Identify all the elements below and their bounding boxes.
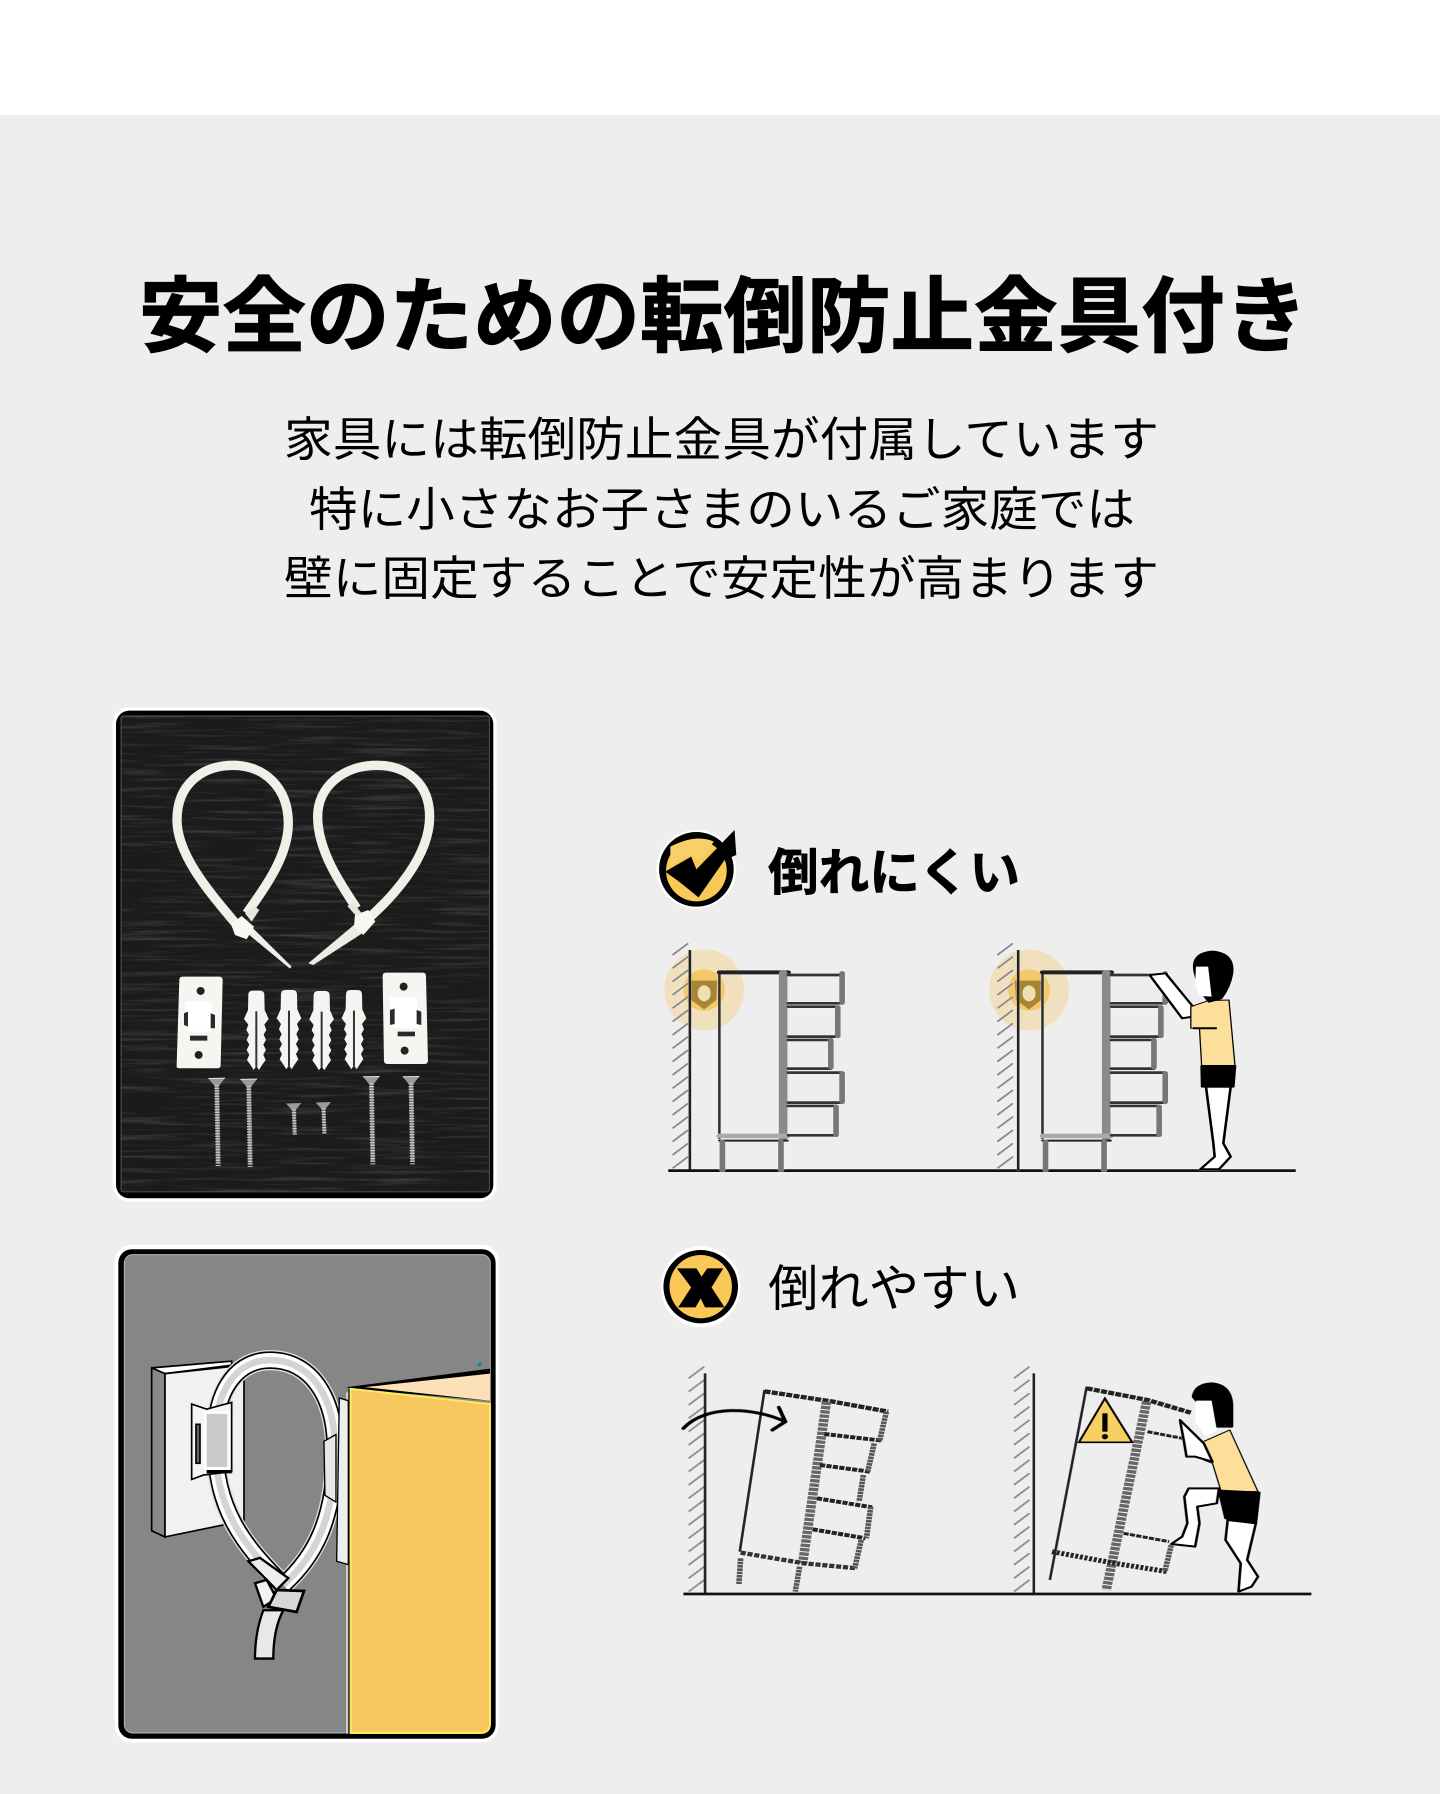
- icon: wall bracket highlight left: [664, 949, 744, 1031]
- wall anchors: [244, 990, 366, 1070]
- intro text block: 家具には転倒防止金具が付属しています: [284, 413, 1159, 466]
- intro text block: [284, 413, 1159, 605]
- intro text block: 壁に固定することで安定性が高まります: [284, 552, 1159, 605]
- illustration: wall and floor left: [668, 943, 1296, 1171]
- label: hard to tip over: 倒れにくい: [768, 845, 1020, 901]
- intro text block: 特に小さなお子さまのいるご家庭では: [309, 483, 1135, 536]
- arrow: tipping direction: [683, 1407, 785, 1430]
- screws: [208, 1076, 421, 1167]
- section: hard to tip over: [656, 830, 1296, 1171]
- buckle on bracket: [192, 1402, 232, 1479]
- strap knot and tail: [248, 1558, 304, 1659]
- cable tie: right: [308, 765, 430, 965]
- icon: warning triangle: [1079, 1398, 1132, 1442]
- icon: check badge: [656, 830, 736, 909]
- illustration: child standing: [1150, 952, 1235, 1169]
- label: easy to tip over: 倒れやすい: [768, 1261, 1020, 1317]
- illustration: tipping cabinet: [739, 1390, 888, 1592]
- title: 安全のための転倒防止金具付き: [139, 272, 1308, 363]
- mounting plate: right: [383, 973, 428, 1064]
- illustration: child climbing: [1171, 1383, 1259, 1592]
- panel: hardware photo: [113, 707, 497, 1202]
- right bracket: [324, 1398, 348, 1565]
- furniture side panel: [347, 1362, 490, 1734]
- illustration: tipping cabinet with child: [1050, 1387, 1191, 1590]
- mounting plate: left: [177, 977, 223, 1068]
- illustration: walls and floor: [683, 1367, 1311, 1594]
- section: easy to tip over: [661, 1246, 1311, 1594]
- cable tie: left: [177, 765, 292, 969]
- illustration: secured cabinet with child: [1042, 972, 1165, 1170]
- icon: x badge: [661, 1246, 741, 1327]
- panel: strap attachment diagram: [115, 1245, 499, 1742]
- illustration: wall right: [997, 943, 1018, 1171]
- strap loop: [215, 1360, 335, 1585]
- icon: wall bracket highlight right: [989, 949, 1069, 1031]
- wall bracket: [152, 1361, 244, 1537]
- illustration: secured cabinet: [719, 972, 842, 1170]
